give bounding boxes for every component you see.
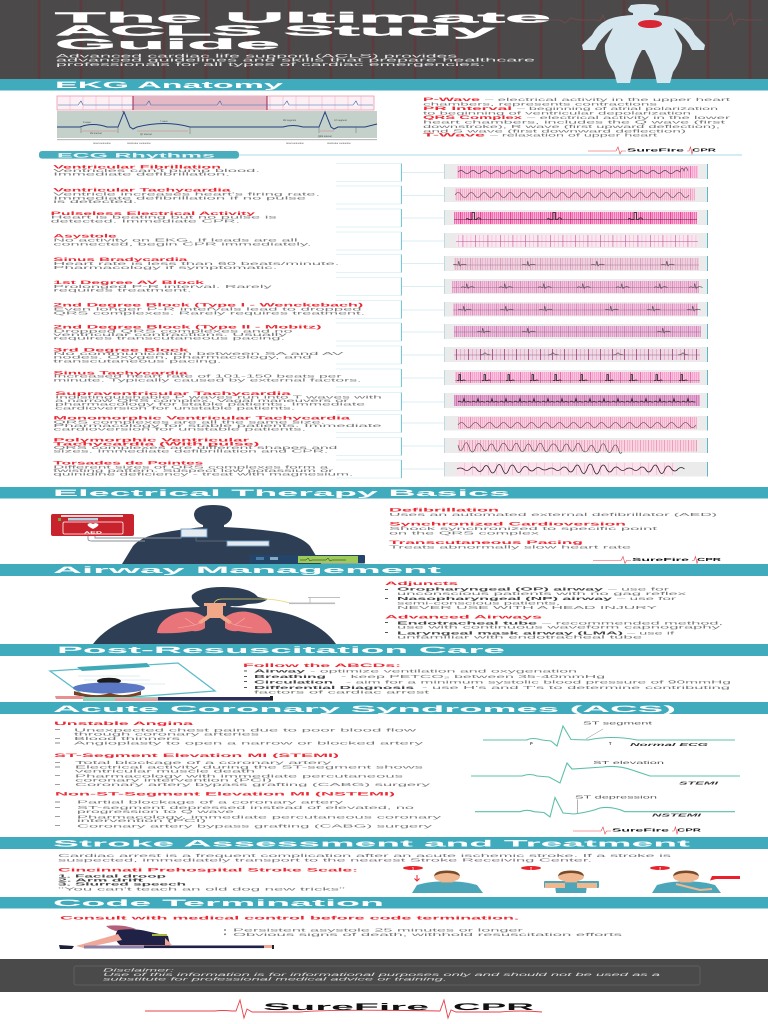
text: airway adjuncts: Advanced Airways — [385, 614, 543, 620]
logo: SureFire CPR small: SureFire — [627, 147, 686, 152]
band: EKG Anatomy — [0, 79, 768, 90]
chart: NSTEMI — [475, 794, 735, 818]
text: termination criteria — [224, 928, 625, 937]
logo: SureFire CPR small: CPR — [677, 827, 703, 832]
text: electrical therapies: on the QRS complex — [389, 530, 542, 535]
rhythm: ventricular tachycardia — [53, 188, 320, 204]
text: electrical therapies: Shock synchronized to specific point — [389, 526, 660, 531]
icon: trachea — [198, 603, 232, 624]
unstable angina: Blood thinners — [74, 736, 183, 741]
EKG anatomy diagram: P wave — [83, 121, 91, 124]
rhythm: monomorphic VT: cardioversion for unstable patients. — [53, 427, 306, 432]
icon: stroke test 1 facial droop: 1 — [412, 866, 414, 870]
rhythm: asystole: Asystole — [53, 234, 117, 240]
logo: SureFire CPR small — [588, 147, 718, 154]
band: Post-Resuscitation Care — [0, 644, 768, 656]
EKG anatomy diagram: Atrial contraction — [286, 142, 304, 145]
rhythm: torsades de pointes: Torsades de Pointes — [53, 460, 204, 466]
text: termination criteria: Persistent asystole 25 minutes or longer — [233, 928, 525, 933]
text: EKG wave definitions — [423, 97, 733, 139]
rhythm: 2nd degree type II: requires transcutaneous pacing. — [53, 336, 285, 341]
chart: normal ECG — [483, 720, 735, 747]
strip: ventricular fibrillation — [444, 164, 708, 179]
text: EKG wave definitions: PR Interval — [423, 106, 514, 112]
illustration: rescuer performing CPR — [59, 925, 274, 949]
rhythm: polymorphic VT: Polymorphic Ventricular — [53, 438, 249, 444]
icon: stroke test 3 slurred speech: 3 — [659, 866, 661, 870]
text: airway adjuncts: – use if — [627, 630, 677, 635]
icon: monitor — [249, 555, 365, 564]
strip: torsades de pointes — [444, 462, 708, 476]
text: airway adjuncts: Laryngeal mask airway (LMA) — [397, 630, 625, 635]
rhythm: 1st degree AV block: Prolonged P-R interval. Rarely — [53, 284, 275, 289]
NSTEMI: intervention (PCI) — [77, 818, 208, 823]
icon: stroke test 3 slurred speech — [650, 866, 740, 893]
title: The Ultimate — [55, 10, 551, 26]
band: Acute Coronary Syndromes — [0, 702, 768, 714]
STEMI: ST-Segment Elevation MI (STEMI) — [54, 753, 340, 759]
rhythm: supraventricular tachycardia: pharmacology for stable patients. Immediate — [55, 402, 367, 407]
icon: airway tube — [214, 598, 340, 604]
intro text — [56, 53, 536, 68]
text: airway adjuncts: Nasopharyngeal (NP) airway — [397, 596, 614, 601]
rhythm: ventricular fibrillation: Immediate defibrillation. — [53, 172, 230, 177]
text: EKG wave definitions: to beginning of ventricular depolarization — [423, 111, 693, 116]
strip: 1st degree AV block — [444, 279, 708, 294]
logo: SureFire CPR large: CPR — [453, 1002, 534, 1013]
rhythm: ventricular fibrillation: Ventricles can't pump blood. — [53, 168, 260, 173]
chart: normal ECG: Normal ECG — [630, 742, 710, 747]
text: ABCDs list: Follow the ABCDs: — [243, 663, 402, 669]
text: airway adjuncts: NEVER USE WITH A HEAD INJURY — [397, 605, 657, 610]
EKG anatomy diagram — [57, 96, 377, 145]
strip: 3rd degree block — [444, 347, 708, 362]
rhythm: pulseless electrical activity: Heart is beating but no pulse is — [51, 215, 280, 220]
logo: SureFire CPR small: SureFire — [612, 827, 671, 832]
icon: stroke test 2 arm drift: 2 — [530, 866, 532, 870]
rhythm: 3rd degree block: 3rd Degree Block — [53, 347, 189, 353]
rhythm: monomorphic VT: QRS complexes are all the same size. — [53, 419, 325, 424]
STEMI: coronary intervention (PCI) — [75, 778, 274, 783]
strip: pulseless electrical activity — [444, 210, 708, 225]
chart: NSTEMI: ST depression — [575, 794, 659, 800]
STEMI: Total blockage of a coronary artery — [75, 760, 334, 765]
rhythm: polymorphic VT — [53, 438, 339, 454]
strip: sinus bradycardia — [444, 256, 708, 271]
rhythm: 2nd degree type I — [53, 303, 365, 315]
intro text: professionals for all types of cardiac emergencies. — [56, 62, 485, 68]
text: EKG wave definitions: QRS Complex — [423, 115, 523, 121]
band: Post-Resuscitation Care: Post-Resuscitation Care — [57, 645, 505, 655]
STEMI: Coronary artery bypass grafting (CABG) surgery — [75, 782, 433, 787]
STEMI: Electrical activity during the ST-segment shows — [75, 765, 426, 770]
EKG anatomy diagram: T wave — [160, 120, 168, 123]
rhythm: monomorphic VT — [53, 416, 384, 432]
band: Airway Management — [0, 564, 768, 576]
chart: normal ECG: P — [530, 741, 533, 746]
chart: normal ECG: ST segment — [583, 720, 654, 726]
text: termination criteria: Obvious signs of death, withhold resuscitation efforts — [233, 932, 625, 937]
strip: polymorphic VT — [444, 438, 708, 453]
band: Code Termination — [0, 897, 768, 908]
text: Cincinnati stroke scale — [58, 867, 359, 891]
NSTEMI: ST-segment depressed instead of elevated, no — [77, 805, 416, 810]
text: stroke intro — [58, 853, 674, 863]
text: Cincinnati stroke scale: 3. Slurred speech — [58, 882, 187, 887]
rhythm: ventricular tachycardia: is detected. — [53, 199, 137, 204]
panel: disclaimer: substitute for professional medical advice or training. — [103, 977, 447, 982]
logo: SureFire CPR small — [573, 827, 703, 834]
title — [55, 10, 551, 53]
unstable angina: Unexpected chest pain due to poor blood flow — [74, 727, 419, 732]
text: electrical therapies: Treats abnormally slow heart rate — [389, 545, 633, 550]
band: Airway Management: Airway Management — [53, 565, 441, 575]
text: airway adjuncts: Adjuncts — [385, 581, 459, 587]
text: ABCDs list: Breathing — [254, 674, 327, 679]
text: ABCDs list: Differential Diagnosis — [254, 685, 416, 690]
title: ACLS Study — [55, 24, 500, 40]
rhythm: supraventricular tachycardia: Supraventricular Tachycardia — [55, 391, 291, 397]
panel: rhythm strips — [444, 164, 708, 476]
heading: ECG Rhythms pill: ECG Rhythms — [57, 152, 217, 159]
EKG anatomy diagram: Atrial contraction — [93, 142, 111, 145]
EKG anatomy diagram: Ventricular contraction — [127, 142, 151, 145]
text: ABCDs list: - use H's and T's to determine contributing — [422, 685, 732, 690]
rhythm: 2nd degree type II — [53, 324, 323, 341]
chart: normal ECG: T — [609, 741, 612, 746]
logo: SureFire CPR small: SureFire — [632, 557, 691, 562]
logo: SureFire CPR small: CPR — [692, 147, 718, 152]
rhythm: asystole: No activity on EKG. If leads are all — [53, 238, 298, 243]
text: Cincinnati stroke scale: 1. Facial droop — [58, 873, 167, 878]
text: Cincinnati stroke scale: Cincinnati Prehospital Stroke Scale: — [58, 867, 359, 873]
band: EKG Anatomy: EKG Anatomy — [55, 80, 286, 90]
chart: STEMI: STEMI — [679, 780, 721, 786]
rhythm: ventricular fibrillation — [53, 164, 260, 177]
band: Electrical Therapy Basics: Electrical Therapy Basics — [53, 488, 510, 498]
NSTEMI: Pharmacology, immediate percutaneous coronary — [77, 814, 444, 819]
EKG anatomy diagram: Ventricular contraction — [327, 142, 351, 145]
icon: AED box: AED — [84, 530, 104, 534]
rhythm: monomorphic VT: Monomorphic Ventricular Tachycardia — [53, 416, 351, 422]
text: ABCDs list: factors of cardiac arrest — [254, 689, 432, 694]
text: electrical therapies: Synchronized Cardioversion — [389, 522, 626, 528]
illustration: airway torso and lungs — [93, 587, 340, 644]
rhythm: polymorphic VT: QRS complexes are different shapes and — [53, 445, 339, 450]
text: stroke intro: Cardiac arrest is a frequent complication after an acute ischemic stroke. If a stroke is — [58, 853, 674, 858]
rhythm: sinus tachycardia: minute. Typically caused by external factors. — [53, 378, 362, 383]
unstable angina: Angioplasty to open a narrow or blocked artery — [74, 741, 426, 746]
panel: disclaimer — [0, 959, 768, 992]
rhythm: monomorphic VT: Pharmacology for stable patients. Immediate — [53, 423, 384, 428]
strip: ventricular tachycardia — [444, 187, 708, 202]
rhythm: sinus tachycardia — [53, 370, 362, 383]
band: Acute Coronary Syndromes: Acute Coronary Syndromes (ACS) — [53, 704, 676, 714]
illustration: patient on clipboard — [50, 663, 273, 701]
panel: rhythm list text — [51, 164, 384, 477]
rhythm: supraventricular tachycardia: a narrow QRS complex. Vagal maneuvers or — [55, 398, 350, 403]
title: Guide — [55, 37, 280, 53]
icon: AED box — [51, 514, 134, 536]
rhythm: supraventricular tachycardia: cardioversion for unstable patients. — [55, 405, 295, 410]
rhythm: supraventricular tachycardia — [55, 391, 384, 410]
rhythm: torsades de pointes — [53, 460, 353, 477]
EKG anatomy diagram: QRS interval — [318, 135, 332, 138]
rhythm: 2nd degree type I: Even longer P-R intervals lead to dropped — [53, 307, 364, 312]
text: ABCDs list: Circulation — [254, 679, 334, 684]
unstable angina: Unstable Angina — [54, 721, 194, 727]
icon: body silhouette with heart — [582, 4, 705, 83]
rhythm: torsades de pointes: twisting pattern. Suspect low potassium or — [53, 468, 335, 473]
text: EKG wave definitions: heart chambers, includes the Q wave (first — [423, 119, 728, 124]
callout: consult medical control: Consult with medical control before code termination. — [60, 916, 521, 922]
rhythm: polymorphic VT: sizes. Immediate defibrillation and CPR. — [53, 449, 328, 454]
icon: stroke test 1 facial droop — [403, 866, 483, 893]
text: ABCDs list — [243, 663, 733, 694]
text: airway adjuncts — [385, 581, 723, 640]
text: ACS conditions — [54, 721, 444, 828]
strip: sinus tachycardia — [444, 370, 708, 385]
text: electrical therapies — [389, 508, 719, 550]
rhythm: 2nd degree type I: 2nd Degree Block (Type I - Wenckebach) — [53, 303, 364, 309]
text: EKG wave definitions: – relaxation of upper heart — [490, 133, 660, 138]
header panel — [0, 0, 768, 79]
rhythm: 1st degree AV block: 1st Degree AV Block — [53, 280, 205, 286]
rhythm: ventricular tachycardia: Ventricle increases heart's firing rate. — [53, 191, 320, 196]
text: stroke intro: suspected, immediately transport to the nearest Stroke Receiving Center. — [58, 858, 592, 863]
rhythm: 1st degree AV block — [53, 280, 275, 293]
text: Cincinnati stroke scale: "You can't teach an old dog new tricks" — [58, 886, 347, 891]
strip: monomorphic VT — [444, 416, 708, 430]
EKG anatomy diagram: PR interval — [90, 132, 102, 135]
text: EKG wave definitions: – beginning of atrial polarization — [517, 106, 720, 111]
unstable angina — [54, 721, 426, 746]
NSTEMI — [55, 792, 444, 828]
rhythm: ventricular fibrillation: Ventricular Fibrillation — [53, 164, 221, 170]
text: EKG wave definitions: P-Wave — [423, 97, 481, 103]
panel: disclaimer: Use of this information is for informational purposes only and should not be used as a — [103, 972, 662, 977]
rhythm: pulseless electrical activity — [51, 211, 280, 224]
text: EKG wave definitions: downstroke), R wave (first upward deflection), — [423, 124, 720, 129]
STEMI — [54, 753, 433, 787]
band: Stroke Assessment and Treatment — [0, 837, 768, 849]
rhythm: sinus tachycardia: Increased heart rate of 101-150 beats per — [53, 374, 343, 379]
intro text: Advanced cardiac life support (ACLS) provides — [56, 53, 459, 59]
text: EKG wave definitions: and S wave (first downward deflection) — [423, 128, 688, 133]
icon: faint ekg line — [548, 13, 762, 25]
text: electrical therapies: Transcutaneous Pacing — [389, 540, 583, 546]
text: electrical therapies: Defibrillation — [389, 508, 499, 514]
rhythm: asystole — [53, 234, 312, 246]
strip: 2nd degree type I — [444, 302, 708, 316]
illustration: AED and torso — [51, 505, 365, 564]
text: airway adjuncts: Oropharyngeal (OP) airway — [397, 586, 605, 591]
text: airway adjuncts: use with continuous waveform capnography — [397, 625, 723, 630]
rhythm: 2nd degree type I: QRS complexes. Rarely requires treatment. — [53, 310, 365, 315]
logo: SureFire CPR small — [593, 556, 723, 564]
rhythm: 3rd degree block — [53, 347, 344, 363]
EKG anatomy diagram: ST segment — [334, 119, 347, 122]
rhythm: torsades de pointes: Different sizes of QRS complexes form a — [53, 464, 330, 469]
text: Cincinnati stroke scale: 2. Arm drift — [58, 878, 145, 883]
rhythm: ventricular tachycardia: Immediate defibrillation if no pulse — [53, 195, 308, 200]
panel: disclaimer: Disclaimer: — [103, 968, 176, 973]
text: EKG wave definitions: chambers, represents contractions — [423, 102, 660, 107]
NSTEMI: progression to Q wave — [77, 809, 236, 814]
rhythm: sinus bradycardia: Sinus Bradycardia — [53, 257, 188, 263]
intro text: advanced guidelines and skills that prepare healthcare — [56, 58, 536, 64]
text: airway adjuncts: – use for — [608, 586, 671, 591]
chart: NSTEMI: NSTEMI — [652, 813, 704, 818]
text: airway adjuncts: – recommended method, — [542, 620, 723, 625]
NSTEMI: Partial blockage of a coronary artery — [77, 800, 346, 805]
text: airway adjuncts: unfamiliar with endotracheal tube — [397, 635, 644, 640]
text: electrical therapies: Uses an automated external defibrillator (AED) — [389, 512, 719, 517]
rhythm: sinus bradycardia: Pharmacology if symptomatic. — [53, 265, 277, 270]
rhythm: supraventricular tachycardia: Indistinguishable P waves run into T waves with — [55, 394, 384, 399]
rhythm: sinus tachycardia: Sinus Tachycardia — [53, 370, 188, 376]
band: Stroke Assessment and Treatment: Stroke Assessment and Treatment — [53, 838, 690, 848]
text: EKG wave definitions: – electrical activity in the upper heart — [485, 97, 733, 102]
text: airway adjuncts: – use for — [617, 596, 678, 601]
rhythm connectors — [336, 164, 444, 478]
rhythm: ventricular tachycardia: Ventricular Tachycardia — [53, 188, 231, 194]
rhythm: 1st degree AV block: requires treatment. — [53, 288, 192, 293]
rhythm: pulseless electrical activity: detected. Immediate CPR. — [51, 219, 240, 224]
logo: SureFire CPR large: SureFire — [263, 1002, 429, 1013]
STEMI: ventricular muscle death — [75, 769, 257, 774]
rhythm: 2nd degree type II: ventricular contractions. Usually — [53, 332, 290, 337]
text: ABCDs list: - keep PETCO₂ between 35-40mmHg — [341, 674, 607, 679]
strip: 2nd degree type II — [444, 324, 708, 339]
unstable angina: through coronary arteries — [74, 732, 262, 737]
rhythm: sinus bradycardia — [53, 257, 339, 270]
text: airway adjuncts: semi-conscious patients, — [397, 601, 560, 606]
text: ABCDs list: - aim for a minimum systolic blood pressure of 90mmHg — [346, 679, 733, 684]
rhythm: 3rd degree block: transcutaneous pacing. — [53, 358, 222, 363]
NSTEMI: Non-ST-Segment Elevation MI (NSTEMI) — [55, 792, 396, 798]
rhythm: 2nd degree type II: Dropped QRS complexes and no — [53, 328, 295, 333]
rhythm: 3rd degree block: nodes. Oxygen, pharmacology, and — [53, 355, 314, 360]
rhythm: polymorphic VT: Tachycardia (With pulse) — [53, 441, 260, 447]
band: Electrical Therapy Basics — [0, 487, 768, 498]
EKG anatomy diagram: QT interval — [140, 133, 152, 136]
band: Code Termination: Code Termination — [53, 898, 386, 908]
rhythm: pulseless electrical activity: Pulseless Electrical Activity — [51, 211, 256, 217]
EKG anatomy diagram: PR segment — [283, 119, 296, 122]
STEMI: Pharmacology with immediate percutaneous — [75, 773, 406, 778]
heading: ECG Rhythms pill — [39, 151, 742, 159]
NSTEMI: Coronary artery bypass grafting (CABG) surgery — [77, 823, 435, 828]
logo: SureFire CPR large — [145, 1000, 542, 1018]
strip: supraventricular tachycardia — [444, 393, 708, 408]
EKG anatomy diagram: R — [122, 110, 124, 114]
text: airway adjuncts: Endotracheal tube — [397, 620, 539, 625]
rhythm: 3rd degree block: No communication between SA and AV — [53, 351, 344, 356]
text: EKG wave definitions: – electrical activity in the lower — [527, 115, 732, 120]
text: ABCDs list: Airway — [254, 669, 307, 674]
icon: stroke test 2 arm drift — [521, 866, 599, 893]
rhythm: torsades de pointes: quinidine deficiency - treat with magnesium. — [53, 472, 353, 477]
rhythm: 2nd degree type II: 2nd Degree Block (Type II - Mobitz) — [53, 324, 323, 330]
text: EKG wave definitions: T-Wave — [423, 133, 486, 139]
text: airway adjuncts: unconscious patients with no gag reflex — [397, 591, 689, 596]
text: ABCDs list: - optimize ventilation and oxygenation — [310, 669, 579, 674]
logo: SureFire CPR small: CPR — [697, 557, 723, 562]
chart: STEMI: ST elevation — [593, 760, 666, 765]
rhythm: sinus bradycardia: Heart rate is less than 60 beats/minute. — [53, 261, 339, 266]
icon: lungs — [157, 611, 272, 633]
chart: STEMI — [471, 760, 740, 786]
rhythm: asystole: connected, begin CPR immediately. — [53, 241, 312, 246]
strip: asystole — [444, 233, 708, 248]
